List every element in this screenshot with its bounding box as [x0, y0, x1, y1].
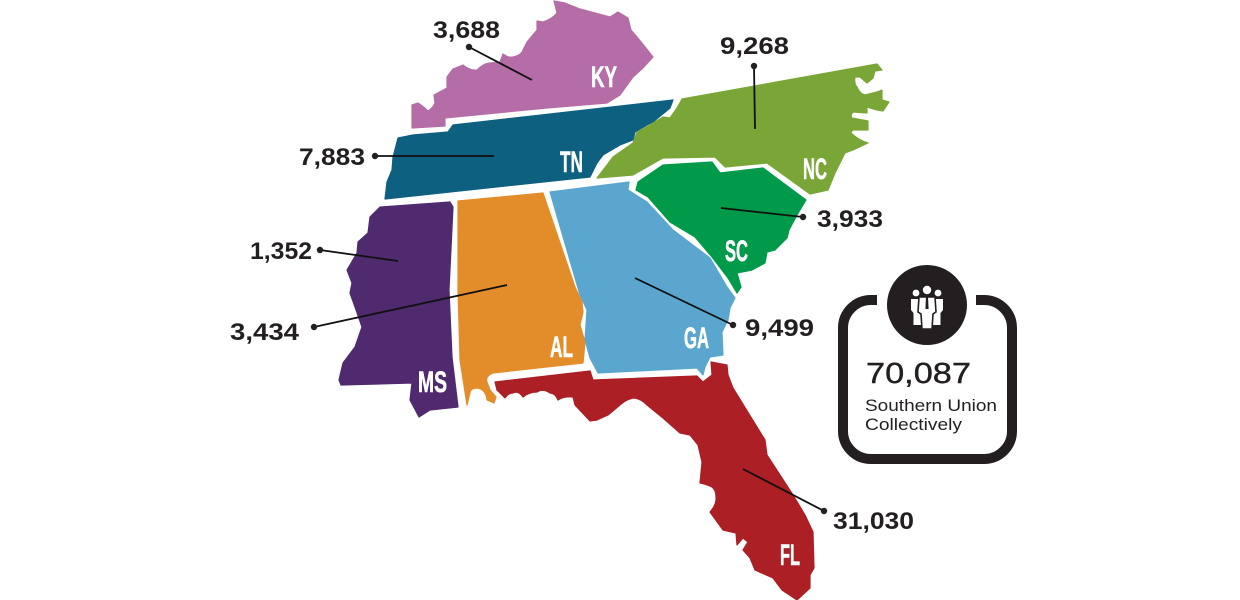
callout: Kentucky 3,688 — [433, 17, 532, 80]
state: Kentucky: KY — [591, 61, 617, 94]
total figure: 70,087 — [866, 358, 971, 390]
state: Florida: FL — [780, 539, 800, 572]
callout: Mississippi 1,352 — [250, 238, 398, 265]
callout: Alabama 3,434 — [230, 285, 507, 346]
callout: North Carolina 9,268 — [720, 33, 789, 129]
panel: Southern Union total — [843, 265, 1012, 459]
state: South Carolina — [636, 162, 806, 293]
state: South Carolina: SC — [725, 235, 748, 268]
state: Mississippi — [339, 202, 458, 417]
callout: Alabama 3,434: 3,434 — [230, 319, 299, 346]
callout: Georgia 9,499 — [635, 278, 814, 342]
total caption: Southern Union — [865, 397, 997, 415]
state: Tennessee — [385, 100, 673, 199]
map of Southern Union states — [339, 1, 889, 600]
callout: Tennessee 7,883: 7,883 — [299, 144, 365, 171]
callout: South Carolina 3,933 — [721, 206, 883, 233]
callout: South Carolina 3,933: 3,933 — [817, 206, 883, 233]
state: Kentucky — [412, 1, 653, 128]
icon: group of people — [887, 265, 967, 345]
state: Alabama: AL — [550, 331, 573, 364]
total caption — [865, 397, 997, 434]
state: Alabama — [458, 193, 585, 405]
callout: Tennessee 7,883 — [299, 144, 494, 171]
state: North Carolina — [597, 64, 889, 194]
callout: Kentucky 3,688: 3,688 — [433, 17, 500, 44]
state: Georgia: GA — [684, 322, 709, 355]
total caption: Collectively — [865, 416, 963, 434]
state: North Carolina: NC — [803, 153, 827, 186]
state: Florida — [495, 362, 814, 600]
callout: Georgia 9,499: 9,499 — [745, 315, 814, 342]
callout: North Carolina 9,268: 9,268 — [720, 33, 789, 60]
callout: Florida 31,030: 31,030 — [833, 508, 914, 535]
state: Mississippi: MS — [418, 366, 447, 399]
callout: Florida 31,030 — [743, 469, 914, 535]
state: Tennessee: TN — [560, 146, 583, 179]
callout: Mississippi 1,352: 1,352 — [250, 238, 312, 265]
state: Georgia — [550, 182, 735, 375]
